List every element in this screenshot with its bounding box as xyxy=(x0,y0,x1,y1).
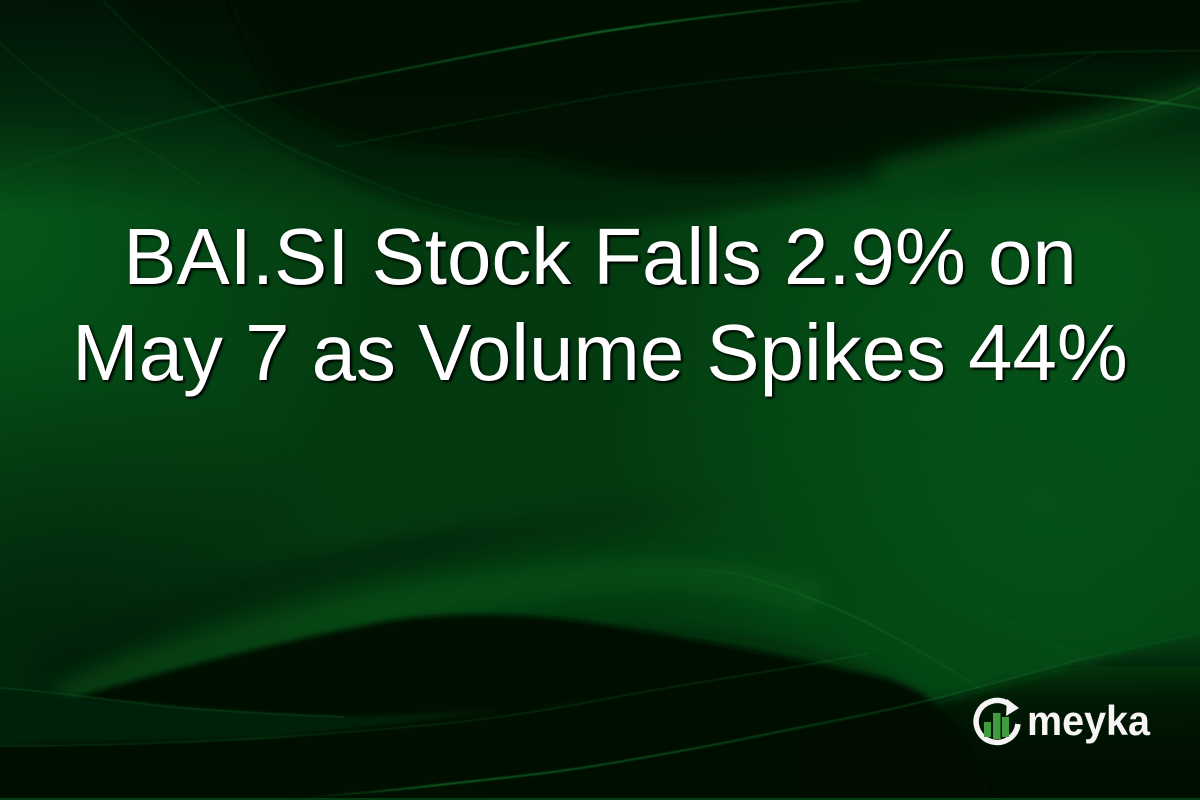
wordmark: meyka xyxy=(1027,697,1151,744)
title xyxy=(72,212,1128,400)
title: BAI.SI Stock Falls 2.9% on xyxy=(123,212,1077,301)
icon: ring with bars xyxy=(976,699,1019,742)
logo: meyka xyxy=(973,697,1151,746)
light streaks: lower xyxy=(0,569,1200,798)
title: May 7 as Volume Spikes 44% xyxy=(72,308,1128,397)
light streaks: upper xyxy=(0,0,1200,225)
